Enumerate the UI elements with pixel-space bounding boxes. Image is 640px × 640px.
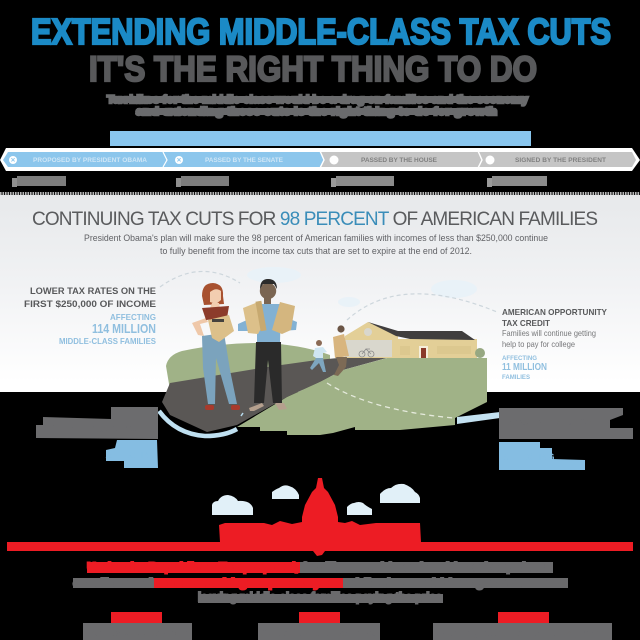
illustration: woman with box (192, 283, 240, 410)
callout: left statistic (36, 407, 158, 468)
heading: CONTINUING TAX CUTS FOR 98 PERCENT OF AMERICAN FAMILIES (32, 209, 598, 230)
stat: left consequence: Families would pay more (86, 628, 189, 639)
illustration: hill and road (159, 343, 500, 436)
text: consequence statement: taxes would go up next year (155, 576, 342, 590)
timeline: legislative progress: ✕ (10, 157, 16, 164)
dashed flight paths and clouds (160, 267, 497, 320)
timeline dates (12, 176, 547, 187)
timeline: legislative progress: ✕ (176, 157, 182, 164)
callout: left statistic: Child Tax Credit (44, 423, 154, 435)
text block: lower tax rates: LOWER TAX RATES ON THE (30, 286, 156, 297)
text block: american opportunity tax credit: AFFECTING (502, 355, 537, 362)
text: consequence statement (73, 560, 568, 604)
status banner (110, 131, 531, 146)
stat: right consequence (433, 612, 612, 640)
text: consequence statement: Under the Republican Tax proposal, (87, 560, 299, 574)
panel: continuing tax cuts (0, 194, 640, 392)
callout: right statistic: Earned Income Tax Credit (503, 417, 604, 428)
illustration: house (345, 322, 485, 358)
callout: right statistic: AFFECTING (503, 452, 554, 462)
text: consequence statement: families would not be able to keep these (302, 560, 552, 574)
text block: american opportunity tax credit (502, 307, 607, 381)
text block: lower tax rates (24, 286, 156, 346)
text block: lower tax rates: 114 MILLION (92, 322, 156, 336)
stat: center consequence: Students would pay more (261, 628, 377, 639)
text block: american opportunity tax credit: Families will continue getting (502, 328, 596, 338)
timeline: legislative progress: PROPOSED BY PRESIDENT OBAMA (33, 157, 147, 164)
stat: left consequence (83, 612, 192, 640)
timeline: legislative progress: PASSED BY THE HOUSE (361, 157, 438, 164)
text block: lower tax rates: AFFECTING (110, 312, 156, 322)
illustration: man with grocery bags (238, 279, 297, 411)
timeline: legislative progress (0, 148, 640, 171)
intro paragraph: to fully benefit from the income tax cuts that are set to expire at the end of 2012. (160, 246, 472, 257)
timeline: legislative progress: PASSED BY THE SENATE (205, 157, 284, 164)
intro text: Tax hikes for the middle class would be a drag on families and the economy (107, 94, 529, 106)
intro text (107, 94, 529, 118)
text block: american opportunity tax credit: TAX CREDIT (502, 318, 551, 328)
intro text: and extending these cuts is the right thing to do for growth (136, 106, 497, 118)
title: IT'S THE RIGHT THING TO DO (89, 50, 537, 89)
text: consequence statement: leaving middle-class families paying the price (198, 590, 442, 604)
timeline: legislative progress: SIGNED BY THE PRESIDENT (515, 157, 606, 164)
intro paragraph (84, 233, 548, 257)
callout: right statistic (499, 408, 633, 470)
text: consequence statement: credits and (73, 576, 153, 590)
illustration: running child (310, 340, 327, 372)
callout: left statistic: AFFECTING (106, 450, 157, 460)
text block: american opportunity tax credit: AMERICAN OPPORTUNITY (502, 307, 607, 317)
text block: lower tax rates: FIRST $250,000 OF INCOME (24, 299, 156, 310)
status banner: WHERE THE MIDDLE-CLASS TAX CUTS STAND TODAY (115, 133, 526, 145)
icon: capitol building and clouds (7, 478, 633, 556)
text block: lower tax rates: MIDDLE-CLASS FAMILIES (59, 336, 156, 346)
illustration: man walking to house (333, 325, 349, 376)
text block: american opportunity tax credit: help to pay for college (502, 339, 575, 349)
intro paragraph: President Obama's plan will make sure the 98 percent of American families with incomes of less than $250,000 continue (84, 233, 548, 244)
text block: american opportunity tax credit: 11 MILLION (502, 362, 547, 373)
text block: american opportunity tax credit: FAMILIES (502, 374, 531, 381)
stat: center consequence (258, 612, 380, 640)
stat: right consequence: Working parents would pay more (436, 628, 609, 639)
title (31, 11, 611, 89)
text: consequence statement: while the wealthiest get even more (344, 576, 567, 590)
